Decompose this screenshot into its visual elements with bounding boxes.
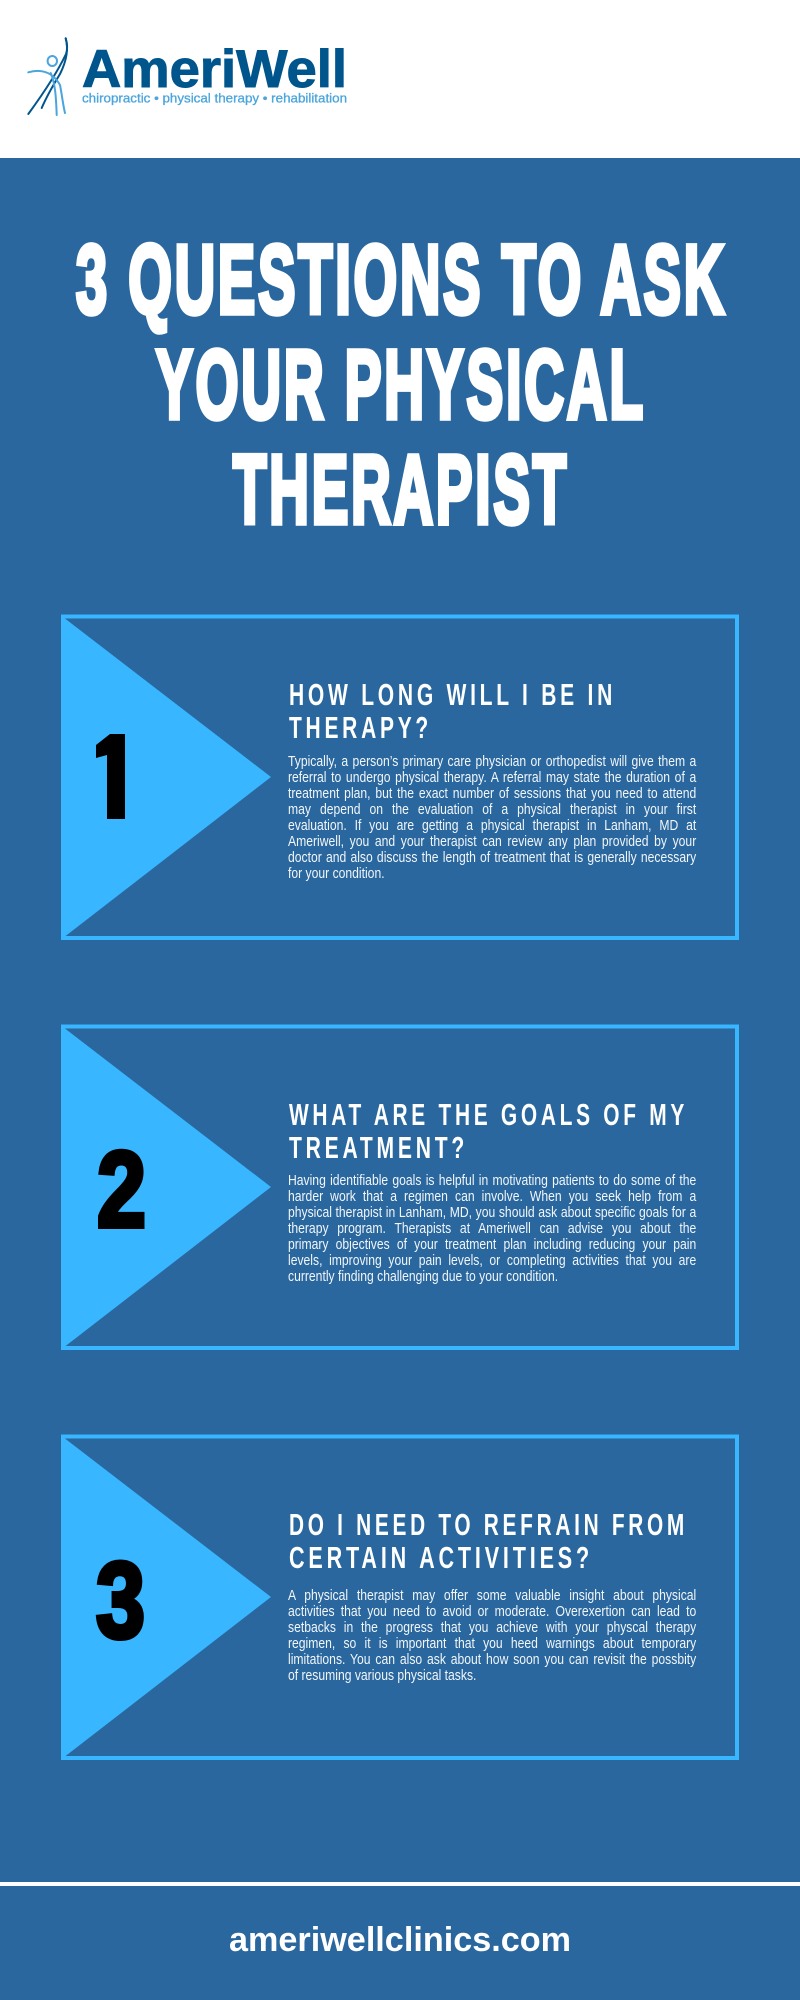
body text [288, 753, 696, 882]
icon: stretching figure [28, 38, 67, 115]
body text: currently finding challenging due to your condition. [288, 1268, 558, 1285]
body text: setbacks in the progress that you achieve with your physcal therapy [288, 1619, 696, 1636]
heading [289, 1097, 688, 1165]
triangle [63, 1027, 271, 1348]
body text: levels, improving your pain levels, or completing activities that you are [288, 1252, 696, 1269]
panel frame [63, 1436, 737, 1758]
body text: of resuming various physical tasks. [288, 1667, 476, 1684]
heading: THERAPY? [289, 710, 432, 745]
body text: Having identifiable goals is helpful in motivating patients to do some of the [288, 1172, 696, 1189]
body text: doctor and also discuss the length of treatment that is generally necessary [288, 849, 696, 866]
body text: A physical therapist may offer some valuable insight about physical [288, 1587, 696, 1604]
heading [289, 1507, 688, 1575]
body text: Typically, a person’s primary care physician or orthopedist will give them a [288, 753, 696, 770]
footer [0, 1882, 800, 2000]
body text: treatment plan, but the exact number of sessions that you need to attend [288, 785, 696, 802]
body text: harder work that a regimen can involve. When you seek help from a [288, 1188, 696, 1205]
triangle [63, 617, 271, 938]
number 3: 3 [96, 1540, 145, 1660]
body text: for your condition. [288, 865, 385, 882]
logo tagline: chiropractic • physical therapy • rehabilitation [82, 90, 347, 106]
body text: limitations. You can also ask about how soon you can revisit the possbity [288, 1651, 696, 1668]
logo wordmark: AmeriWell [82, 40, 347, 99]
body text [288, 1172, 696, 1285]
number 1: 1 [81, 712, 146, 842]
body text: activities that you need to avoid or moderate. Overexertion can lead to [288, 1603, 696, 1620]
number 2: 2 [97, 1128, 146, 1250]
body text: therapy program. Therapists at Ameriwell can advise you about the [288, 1220, 696, 1237]
panel: question 2 [61, 1024, 739, 1350]
logo [27, 37, 347, 116]
panel frame [63, 616, 737, 938]
heading: CERTAIN ACTIVITIES? [289, 1540, 593, 1575]
body text [288, 1587, 696, 1684]
panel: question 3 [61, 1434, 739, 1760]
body text: physical therapist in Lanham, MD, you should ask about specific goals for a [288, 1204, 696, 1221]
website url: ameriwellclinics.com [229, 1921, 571, 1959]
body text: referral to undergo physical therapy. A referral may state the duration of a [288, 769, 696, 786]
body text: may depend on the evaluation of a physical therapist in your first [288, 801, 696, 818]
heading: TREATMENT? [289, 1130, 468, 1165]
header: logo band [0, 0, 800, 158]
heading [289, 677, 616, 745]
body text: Ameriwell, you and your therapist can review any plan provided by your [288, 833, 696, 850]
body text: primary objectives of your treatment plan including reducing your pain [288, 1236, 696, 1253]
title [76, 225, 727, 544]
body text: evaluation. If you are getting a physical therapist in Lanham, MD at [288, 817, 696, 834]
triangle [63, 1437, 271, 1758]
panel: question 1 [61, 614, 739, 940]
body text: regimen, so it is important that you heed warnings about temporary [288, 1635, 696, 1652]
panel frame [63, 1026, 737, 1348]
